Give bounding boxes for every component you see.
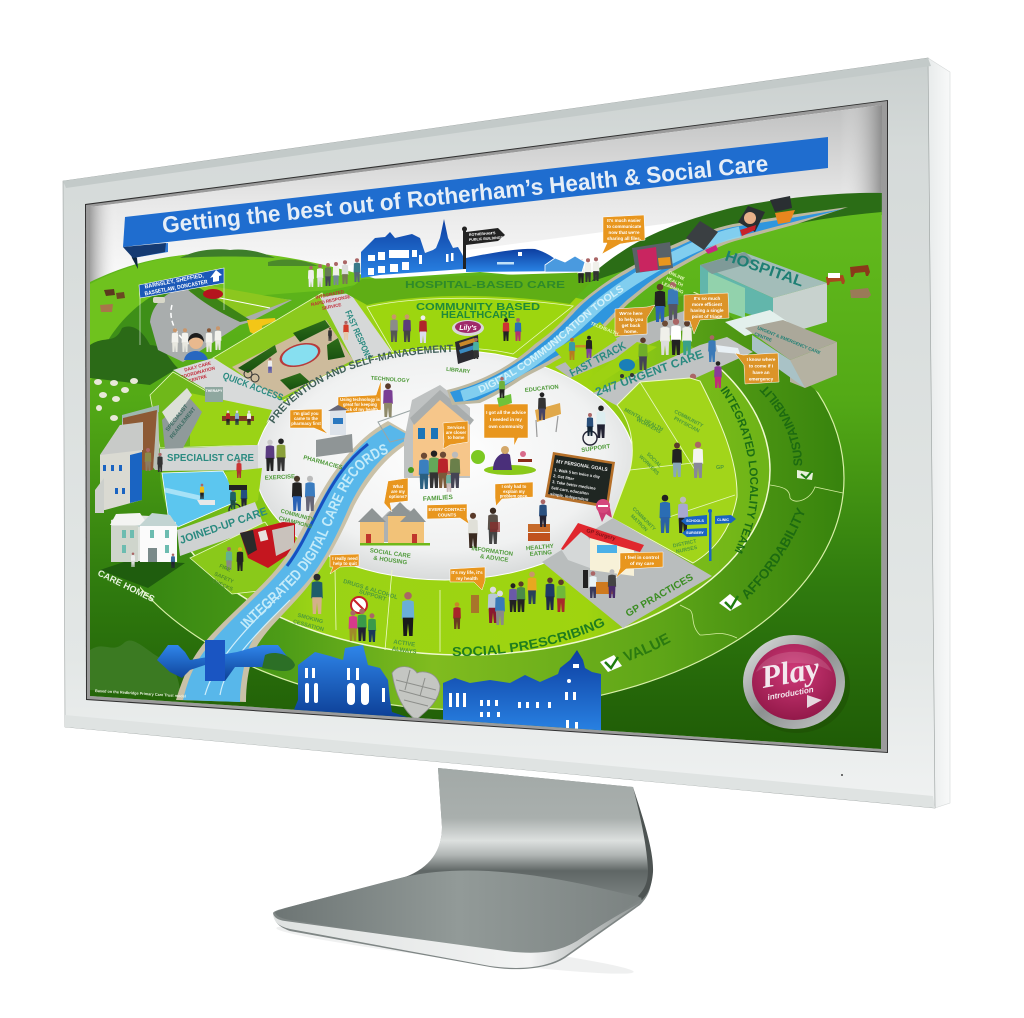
road: quick access: COORDINATION	[180, 365, 216, 380]
locality team puzzle wedge: MENTAL HEALTH	[623, 407, 664, 433]
smoking cessation, drugs and active: SMOKING	[297, 613, 324, 625]
white learning labels: HEALTH	[665, 276, 684, 288]
road: urgent care: 24/7 URGENT CARE	[594, 348, 705, 399]
housing cluster	[358, 502, 430, 566]
horses in the top left field	[100, 289, 125, 312]
inner ring	[160, 285, 770, 655]
speech bubble: easier to communicate: It's much easier	[607, 218, 641, 223]
locality team puzzle wedge: GP	[716, 465, 724, 471]
land base	[90, 212, 882, 750]
speech bubble: services closer to home: are closer	[446, 430, 466, 435]
speech bubble: know where to come: have an	[752, 370, 770, 375]
speech bubble: here to help: home.	[624, 329, 638, 334]
blue direction signpost: SURGERY	[686, 531, 704, 535]
play introduction button: introduction	[767, 685, 814, 702]
community champions: CHAMPIONS	[278, 516, 313, 530]
community based healthcare panel: Lily's	[459, 325, 477, 332]
housing cluster: & HOUSING	[373, 556, 408, 566]
speech bubble: using technology: Using technology is	[340, 397, 381, 402]
specialist reablement puzzle piece	[150, 372, 272, 450]
speech bubble: easier to communicate: sharing all files.	[607, 236, 641, 241]
affordability check and label	[719, 507, 804, 611]
road: fast response: RAPID RESPONSE	[310, 294, 351, 307]
ring puzzle joints	[680, 485, 843, 638]
speech bubble: single point of triage: It's so much	[694, 296, 720, 301]
information and advice: & ADVICE	[480, 554, 509, 564]
blue abbey ruins	[293, 645, 410, 718]
speech bubble: pharmacy: I'm glad you	[294, 411, 319, 416]
healthy eating figure: EATING	[530, 550, 553, 558]
smoking cessation, drugs and active: CESSATION	[292, 619, 324, 633]
speech bubble: pharmacy: pharmacy first	[291, 421, 321, 426]
fire safety piece and engine: FIRE	[218, 563, 232, 574]
integrated locality team label: INTEGRATED LOCALITY TEAM	[720, 386, 758, 554]
hospital-based care band: HOSPITAL-BASED CARE	[405, 279, 565, 291]
speech bubble: what are my options: options?	[389, 494, 407, 499]
support wheelchair	[581, 405, 611, 454]
cows in the top right field	[826, 265, 871, 298]
blue bridge	[157, 640, 295, 681]
speech bubble: know where to come: I know where	[747, 357, 776, 362]
blue town hall and church silhouette	[361, 219, 465, 278]
speech bubble: pharmacy: came to the	[294, 416, 319, 421]
road: fast response: FAST RESPONSE	[343, 309, 376, 366]
smoking cessation, drugs and active: SUPPORT	[358, 589, 387, 603]
road: quick access: QUICK ACCESS	[221, 371, 285, 404]
healthy eating figure: HEALTHY	[526, 544, 554, 552]
family group	[408, 450, 485, 503]
sustainability check and label: SUSTAINABILITY	[760, 386, 802, 466]
specialist reablement puzzle piece: REABLEMENT	[169, 406, 198, 440]
social prescribing label: SOCIAL PRESCRIBING	[452, 618, 604, 656]
hospital building: URGENT & EMERGENCY CARE	[757, 325, 821, 355]
road: fast response: INTEGRATED	[315, 289, 345, 300]
ambulance	[247, 318, 276, 334]
road: quick access: DAILY CARE	[184, 361, 212, 373]
gardening person	[484, 446, 536, 475]
title banner	[123, 137, 828, 269]
speech bubble: my life my health	[450, 567, 485, 590]
speech bubble: need help to quit	[330, 554, 359, 574]
speech bubble: know where to come: emergency	[749, 376, 774, 382]
speech bubble: services closer to home	[443, 421, 468, 449]
road: fast track	[555, 311, 695, 385]
road: fast response: SERVICE	[322, 302, 342, 311]
speech bubble: every contact counts: COUNTS	[438, 512, 456, 518]
speech bubble: advice in community: own community	[489, 424, 524, 429]
hospital building	[700, 248, 837, 388]
GP practices panel: GP Surgery	[585, 528, 617, 542]
outer value ring	[140, 292, 845, 710]
white learning labels	[590, 270, 685, 336]
community based healthcare panel: HEALTHCARE	[441, 310, 516, 321]
locality team puzzle wedge: WORKERS	[637, 454, 661, 477]
water and jet ski	[162, 471, 240, 527]
GP practices panel: GP PRACTICES	[624, 572, 696, 620]
daily care coordinator and staff	[172, 326, 221, 360]
table meeting group	[555, 322, 617, 370]
locality team puzzle wedge: WORKERS	[635, 417, 662, 435]
family group: FAMILIES	[423, 494, 454, 503]
healthy eating figure	[526, 499, 554, 558]
speech bubble: using technology: track of my health	[342, 407, 378, 412]
signpost: PUBLIC BUILDINGS	[469, 236, 504, 242]
value check and label: VALUE	[622, 633, 671, 660]
joined-up care figures	[225, 460, 262, 516]
hospital building: CENTRE	[754, 331, 773, 343]
top-right staff	[578, 257, 599, 283]
lookout with technology user	[371, 376, 414, 442]
road: fast response	[310, 289, 392, 366]
white learning labels: LEARNING	[661, 281, 685, 295]
stadium silhouette	[466, 249, 585, 272]
speech bubble: in control of my care	[616, 552, 663, 578]
speech bubble: every contact counts: EVERY CONTACT	[428, 507, 466, 512]
road: quick access: CENTRE	[188, 374, 207, 383]
blue direction signpost: CLINIC	[717, 518, 729, 522]
prevention and self-management label: PREVENTION AND SELF-MANAGEMENT	[268, 344, 453, 424]
signpost	[462, 226, 505, 269]
blue direction signpost	[681, 509, 736, 561]
speech bubble: single point of triage	[684, 293, 729, 334]
white learning labels: TELEHEALTH	[590, 321, 619, 336]
community based healthcare panel: COMMUNITY BASED	[416, 302, 540, 313]
central white area	[255, 350, 635, 580]
social prescribing group	[453, 571, 566, 629]
play introduction button	[743, 635, 850, 733]
speech bubble: need help to quit: help to quit	[333, 561, 357, 566]
pharmacy	[302, 405, 353, 471]
urgent care people	[619, 282, 740, 420]
hospital staff at top centre	[308, 258, 360, 287]
play introduction button: Play	[757, 649, 823, 695]
speech bubble: here to help: get back	[622, 323, 641, 328]
digital devices	[632, 196, 795, 273]
exercise people	[265, 438, 295, 482]
hospital-based care band	[345, 272, 600, 305]
inner ring outline	[190, 368, 771, 656]
speech bubble: know where to come: to come if I	[749, 364, 773, 368]
locality team puzzle wedge: PHYSICIAN	[673, 416, 701, 435]
chalkboard personal goals: simple, independent	[550, 491, 589, 502]
monitor frame	[63, 58, 950, 808]
source credit: Based on the Redbridge Primary Care Trust model	[95, 689, 186, 699]
locality team puzzle wedge: NURSES	[676, 545, 699, 555]
river: integrated digital care records: INTEGRATED DIGITAL CARE RECORDS	[240, 444, 388, 630]
speech bubble: what are my options	[384, 478, 408, 512]
speech bubble: my life my health: It's my life, it's	[451, 570, 483, 575]
chalkboard personal goals: 1. Walk 5 km twice a day	[554, 467, 601, 479]
speech bubble: using technology: great for keeping	[343, 402, 377, 407]
information and advice	[468, 508, 513, 564]
information and advice: INFORMATION	[471, 546, 513, 558]
chalkboard personal goals: MY PERSONAL GOALS	[556, 459, 609, 473]
top left far hills and tree line	[90, 249, 380, 380]
community based healthcare panel	[367, 298, 573, 354]
speech bubble: in control of my care: of my care	[630, 561, 654, 567]
road sign: BARNSLEY, SHEFFIED,	[144, 273, 205, 290]
specialist care building	[95, 405, 160, 513]
speech bubble: advice in community	[484, 404, 528, 446]
speech bubble: only had to explain: explain my	[503, 489, 525, 494]
smoking cessation, drugs and active: ACTIVE	[393, 640, 415, 649]
speech bubble: in control of my care: I feel in control	[625, 555, 659, 561]
speech bubble: here to help: We're here	[619, 311, 643, 316]
chalkboard personal goals: 2. Get fitter	[553, 473, 575, 481]
smoking cessation, drugs and active: DRUGS & ALCOHOL	[342, 579, 399, 601]
road: specialist care	[145, 445, 258, 472]
pharmacy: PHARMACIES	[302, 455, 343, 471]
speech bubble: easier to communicate	[602, 215, 645, 254]
hospital building: HOSPITAL	[723, 248, 806, 290]
river: digital communication tools	[447, 207, 848, 407]
smoking cessation, drugs and active	[292, 570, 440, 656]
road to the motorway	[150, 284, 292, 362]
road: quick access	[173, 358, 285, 425]
care homes houses	[96, 513, 185, 604]
exercise people: EXERCISE	[265, 474, 295, 482]
fire safety piece and engine: CHECKS	[211, 578, 234, 593]
speech bubble: easier to communicate: to communicate	[607, 224, 642, 229]
locality team puzzle wedge: DISTRICT	[672, 538, 698, 549]
speech bubble: what are my options: What	[393, 484, 404, 489]
brick heart	[392, 667, 440, 720]
blue hall and clock tower	[443, 650, 601, 736]
speech bubble: my life my health: my health	[456, 576, 478, 581]
road: urgent care	[593, 337, 753, 410]
sheep	[94, 378, 138, 421]
care homes houses: CARE HOMES	[96, 568, 156, 604]
sustainability check and label	[760, 386, 813, 480]
speech bubble: services closer to home: to home	[448, 435, 465, 440]
river: digital communication tools: DIGITAL COMMUNICATION TOOLS	[478, 286, 624, 393]
speech bubble: only had to explain: I only had to	[502, 484, 527, 489]
forest bottom left	[90, 641, 180, 695]
road sign	[139, 268, 224, 345]
support wheelchair: SUPPORT	[581, 444, 611, 454]
community champions	[278, 476, 315, 530]
far dark hill top right	[590, 192, 882, 282]
river: integrated digital care records	[176, 421, 406, 702]
title banner: Getting the best out of Rotherham’s Health & Social Care	[161, 150, 769, 238]
affordability check and label: AFFORDABILITY	[743, 507, 804, 600]
library	[446, 335, 479, 375]
fire safety piece and engine: SAFETY	[213, 571, 235, 585]
speech bubble: know where to come	[735, 353, 779, 384]
specialist reablement puzzle piece: SPECIALIST	[165, 403, 190, 433]
value check and label	[600, 633, 671, 672]
park puzzle piece	[213, 293, 356, 402]
forest left	[90, 326, 178, 385]
speech bubble: single point of triage: more efficient	[692, 302, 723, 307]
chalkboard personal goals	[545, 452, 615, 522]
speech bubble: here to help: to help you	[619, 317, 643, 322]
road: joined-up care: JOINED-UP CARE	[178, 506, 269, 547]
road: specialist care: SPECIALIST CARE	[167, 452, 254, 464]
speech bubble: need help to quit: I really need	[332, 556, 358, 561]
speech bubble: here to help	[615, 305, 655, 336]
speech bubble: services closer to home: Services	[447, 425, 465, 430]
housing cluster: SOCIAL CARE	[369, 548, 411, 560]
locality team puzzle wedge	[612, 378, 737, 563]
locality team puzzle wedge: MATRON	[629, 514, 649, 533]
chalkboard personal goals: Self-care, education	[551, 485, 590, 496]
locality team puzzle wedge: COMMUNITY	[631, 506, 657, 533]
locality team puzzle wedge: COMMUNITY	[673, 409, 704, 430]
locality team puzzle wedge: SOCIAL	[645, 451, 663, 469]
specialist reablement puzzle piece: THERAPY	[206, 389, 223, 393]
chalkboard personal goals: 3. Take better medicine	[552, 479, 597, 491]
signpost: ROTHERHAM'S	[469, 231, 496, 237]
blue direction signpost: SCHOOLS	[686, 519, 704, 523]
smoking cessation, drugs and active: ALWAYS	[391, 646, 417, 656]
road: fast track: FAST TRACK	[568, 340, 628, 380]
speech bubble: pharmacy	[290, 409, 328, 434]
speech bubble: using technology	[338, 380, 381, 414]
speech bubble: what are my options: are my	[391, 489, 406, 494]
GP practices panel	[542, 518, 712, 628]
illustrated map	[90, 192, 882, 749]
speech bubble: only had to explain: problem once.	[500, 494, 528, 498]
library: LIBRARY	[446, 367, 471, 375]
road sign: BASSETLAW, DONCASTER	[144, 279, 208, 297]
education	[525, 384, 561, 437]
monitor stand	[273, 768, 653, 981]
community champions: COMMUNITY	[280, 509, 315, 523]
speech bubble: single point of triage: having a single	[690, 308, 724, 313]
big house	[404, 385, 474, 478]
speech bubble: only had to explain	[495, 482, 533, 506]
speech bubble: easier to communicate: now that we're	[608, 230, 640, 235]
speech bubble: advice in community: I needed in my	[490, 417, 522, 422]
fire safety piece and engine	[190, 522, 300, 594]
lookout with technology user: TECHNOLOGY	[371, 376, 410, 384]
screen background sky	[86, 100, 887, 752]
speech bubble: single point of triage: point of triage	[692, 314, 723, 319]
speech bubble: advice in community: I got all the advice	[486, 410, 526, 415]
education: EDUCATION	[525, 384, 559, 394]
speech bubble: every contact counts	[427, 504, 469, 524]
white learning labels: ONLINE	[668, 270, 685, 281]
